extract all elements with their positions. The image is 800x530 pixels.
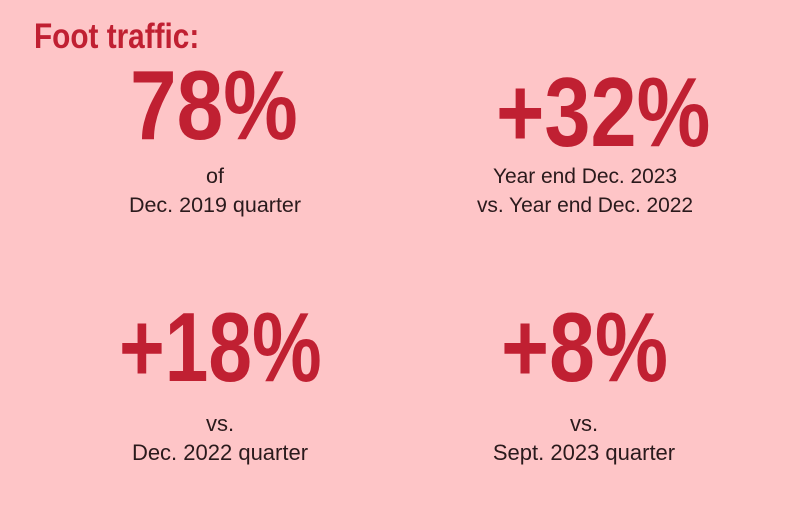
stat: +8% vs. Sept. 2023 quarter: [493, 292, 675, 465]
caption: vs. Sept. 2023 quarter: [493, 411, 675, 465]
number: +18%: +18%: [119, 292, 322, 402]
caption: of Dec. 2019 quarter: of: [206, 164, 224, 188]
caption: vs. Sept. 2023 quarter: vs.: [570, 411, 598, 436]
caption: of Dec. 2019 quarter: Dec. 2019 quarter: [129, 193, 301, 217]
stat: +32% year over year: [477, 57, 710, 217]
title: Foot traffic:: [34, 17, 199, 56]
number: 78%: 78%: [130, 50, 298, 160]
caption: Year end comparison: Year end Dec. 2023: [493, 165, 677, 188]
caption: vs. Sept. 2023 quarter: Sept. 2023 quarter: [493, 440, 675, 465]
caption: vs. Dec. 2022 quarter: Dec. 2022 quarter: [132, 440, 308, 465]
caption: of Dec. 2019 quarter: [129, 164, 301, 217]
caption: vs. Dec. 2022 quarter: [132, 411, 308, 465]
caption: Year end comparison: vs. Year end Dec. 2022: [477, 194, 693, 217]
caption: Year end comparison: [477, 165, 693, 217]
number: +8%: +8%: [501, 292, 668, 402]
number: +32%: +32%: [496, 57, 710, 167]
caption: vs. Dec. 2022 quarter: vs.: [206, 411, 234, 436]
stat: 78% of Dec. 2019 quarter: [129, 50, 301, 217]
stat: +18% vs. Dec. 2022 quarter: [119, 292, 322, 465]
